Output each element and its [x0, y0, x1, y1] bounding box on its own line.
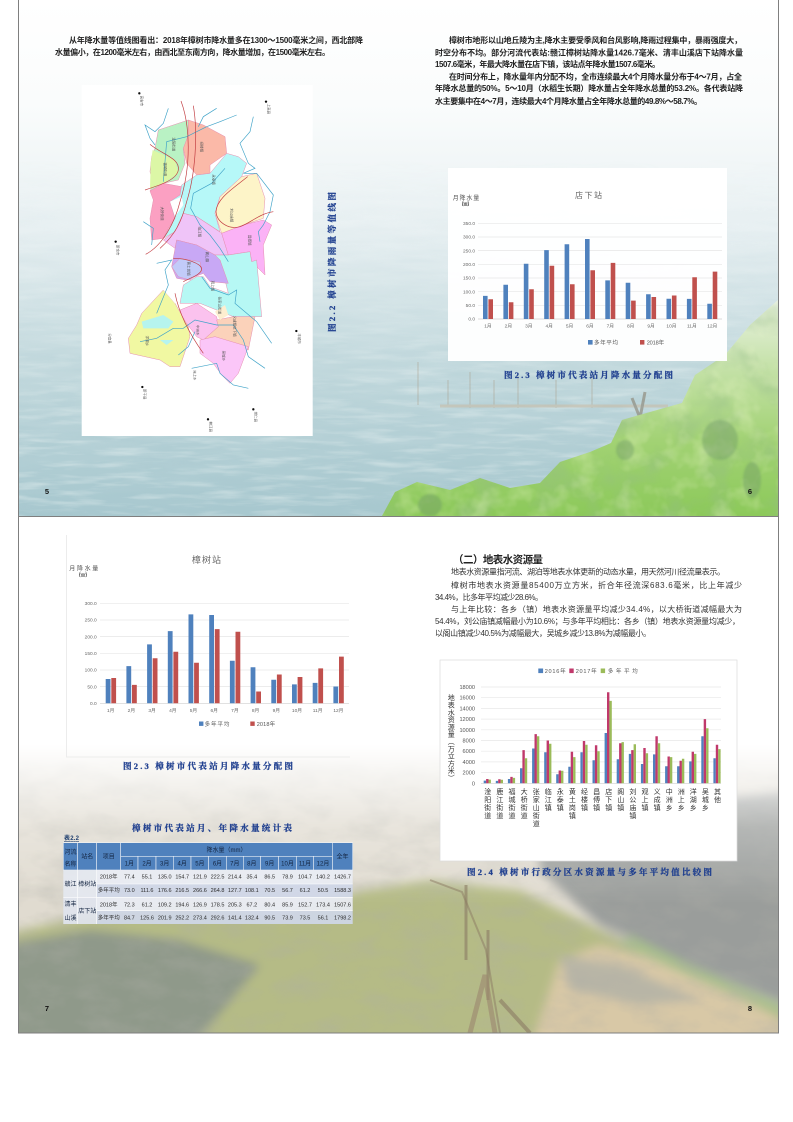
page 6 text paragraphs: 樟树市地形以山地丘陵为主,降水主要受季风和台风影响,降雨过程集中，暴雨强度大，	[449, 35, 742, 45]
legend: 多年平均	[594, 338, 618, 346]
chart panel: surface water by district bar chart: 淦阳街道	[484, 787, 491, 820]
table: monthly and annual rainfall: 252.2	[175, 916, 189, 922]
spread 1 background: water and leaves photo	[19, 126, 778, 516]
chart panel: surface water by district bar chart: 吴城乡	[701, 788, 709, 812]
map panel: rainfall isoline map: 分宜县	[108, 333, 113, 344]
chart panel: surface water by district bar chart: 临江镇	[544, 787, 552, 812]
chart panel: 店下站 monthly rainfall bar chart: 7月	[607, 324, 614, 330]
legend: 多年平均	[204, 720, 230, 728]
table: monthly and annual rainfall: 85.9	[282, 902, 293, 908]
chart panel: 店下站 monthly rainfall bar chart: 1月	[484, 324, 492, 330]
table: monthly and annual rainfall: 141.4	[228, 916, 242, 922]
table: monthly and annual rainfall: 152.7	[298, 902, 312, 908]
chart panel: 樟树站 monthly rainfall bar chart: 100.0	[85, 668, 97, 674]
chart panel: 樟树站 monthly rainfall bar chart: 2月	[128, 708, 135, 714]
table: monthly and annual rainfall: 8月	[247, 860, 256, 868]
map panel: rainfall isoline map: 大桥街道	[160, 207, 165, 221]
table: monthly and annual rainfall: 多年平均	[98, 914, 120, 922]
table: monthly and annual rainfall: 35.4	[246, 875, 257, 881]
table: monthly and annual rainfall: 河流	[64, 848, 77, 856]
page 8 text paragraphs	[435, 566, 742, 638]
map panel: rainfall isoline map: 福城街道	[163, 162, 168, 177]
chart panel: surface water by district bar chart: 刘公庙镇	[629, 787, 636, 820]
page 6 text paragraphs: 在时间分布上，降水量年内分配不均，全市连续最大4个月降水量分布于4～7月，占全	[449, 72, 742, 82]
table: monthly and annual rainfall: 1426.7	[334, 875, 351, 881]
page 8 text paragraphs: 与上年比较：各乡（镇）地表水资源量平均减少34.4%，以大桥街道减幅最大为	[451, 604, 742, 614]
table: monthly and annual rainfall: 项目	[103, 854, 115, 860]
chart panel: surface water by district bar chart: 永泰镇	[556, 787, 564, 812]
chart panel: 店下站 monthly rainfall bar chart: 8月	[627, 324, 634, 330]
legend: 2017年	[576, 667, 597, 675]
map panel: rainfall isoline map: 刘公庙镇	[230, 208, 235, 223]
chart panel: 店下站 monthly rainfall bar chart: 300.0	[463, 235, 475, 241]
chart panel: 店下站 monthly rainfall bar chart: 3月	[525, 324, 533, 330]
table: monthly and annual rainfall: 清丰	[64, 900, 77, 908]
chart panel: 樟树站 monthly rainfall bar chart: 5月	[190, 708, 197, 714]
map caption (rotated): 图2.2 樟树市降雨量等值线图	[326, 192, 337, 332]
table: monthly and annual rainfall: 4月	[178, 860, 187, 868]
map panel: rainfall isoline map: 经楼镇	[200, 142, 205, 153]
map panel: rainfall isoline map	[82, 85, 313, 436]
chart panel: 樟树站 monthly rainfall bar chart: 1月	[107, 708, 114, 714]
table: monthly and annual rainfall: 6月	[213, 860, 222, 868]
chart panel: 店下站 monthly rainfall bar chart: 10月	[666, 324, 677, 330]
map panel: rainfall isoline map: 新余市	[116, 245, 121, 256]
table: monthly and annual rainfall: 降水量（mm）	[206, 846, 246, 854]
axis title: 地表水资源量（万立方米）	[447, 693, 455, 782]
table: monthly and annual rainfall: 多年平均	[98, 886, 120, 894]
map panel: rainfall isoline map: 上高县	[266, 104, 271, 115]
chart panel: surface water by district bar chart: 8000	[463, 738, 475, 744]
page 8 text paragraphs: 地表水资源量指河流、湖泊等地表水体更新的动态水量，用天然河川径流量表示。	[451, 566, 725, 576]
table: monthly and annual rainfall: 10月	[281, 860, 294, 868]
table: monthly and annual rainfall: 73.0	[124, 888, 135, 894]
map panel: rainfall isoline map: 义成镇店下镇	[232, 316, 237, 337]
page 6 text paragraphs: 水主要集中在4～7月，连续最大4个月降水量占全年降水总量的49.8%～58.7%。	[435, 96, 702, 106]
table: monthly and annual rainfall: 樟树站	[78, 880, 96, 888]
table: monthly and annual rainfall: 5月	[195, 860, 205, 868]
map panel: rainfall isoline map: 洋湖乡	[145, 336, 150, 347]
table: monthly and annual rainfall: 214.4	[228, 875, 242, 881]
chart panel: 樟树站 monthly rainfall bar chart: 10月	[292, 708, 302, 714]
chart panel: 樟树站 monthly rainfall bar chart: 9月	[273, 708, 280, 714]
table: monthly and annual rainfall: 赣江	[64, 880, 77, 888]
chart panel: 店下站 monthly rainfall bar chart: 4月	[545, 324, 553, 330]
table: monthly and annual rainfall: 108.1	[245, 888, 259, 894]
chart panel: 樟树站 monthly rainfall bar chart: 月降水量	[69, 564, 98, 572]
map panel: rainfall isoline map: 吴城乡	[221, 351, 226, 362]
caption: figure 2.3 page 6: 图2.3 樟树市代表站月降水量分配图	[504, 369, 673, 380]
table: monthly and annual rainfall: 140.2	[316, 875, 330, 881]
table: monthly and annual rainfall: 104.7	[298, 875, 312, 881]
chart panel: 店下站 monthly rainfall bar chart: 0.0	[468, 317, 475, 323]
chart panel: surface water by district bar chart: 观上镇	[641, 788, 648, 812]
chart panel: surface water by district bar chart: 12000	[459, 717, 475, 723]
chart panel: 樟树站 monthly rainfall bar chart: 250.0	[85, 618, 97, 624]
chart panel: surface water by district bar chart: 福城街道	[508, 787, 516, 820]
chart panel: 樟树站 monthly rainfall bar chart	[66, 535, 350, 757]
chart panel: 樟树站 monthly rainfall bar chart: 150.0	[85, 651, 97, 657]
chart panel: surface water by district bar chart	[440, 660, 737, 861]
chart panel: 樟树站 monthly rainfall bar chart: 11月	[313, 708, 323, 714]
chart panel: 樟树站 monthly rainfall bar chart: 300.0	[85, 601, 97, 607]
page 5 text paragraph: 从年降水量等值线图看出：2018年樟树市降水量多在1300～1500毫米之间，西北部降	[69, 35, 363, 45]
table: monthly and annual rainfall: 126.9	[193, 902, 207, 908]
chart panel: surface water by district bar chart: 18000	[459, 685, 475, 691]
table: monthly and annual rainfall: 216.5	[175, 888, 189, 894]
legend	[588, 338, 665, 346]
table: monthly and annual rainfall: 2月	[142, 860, 152, 868]
page 6 text paragraphs: 1507.6毫米，年最大降水量在店下镇，该站点年降水量1507.6毫米。	[435, 59, 660, 69]
map panel: rainfall isoline map: 张家山街道	[217, 297, 222, 315]
map panel: rainfall isoline map: 昌傅镇	[247, 235, 252, 246]
table: monthly and annual rainfall: 1507.6	[334, 902, 351, 908]
map panel: rainfall isoline map: 高安市	[140, 96, 145, 107]
table label: 表2.2	[64, 834, 80, 842]
page 8 text paragraphs: 以阁山镇减少40.5%为减幅最大，吴城乡减少13.8%为减幅最小。	[435, 628, 651, 638]
table: monthly and annual rainfall: 名称	[64, 860, 77, 868]
table: monthly and annual rainfall: 78.9	[282, 875, 293, 881]
table: monthly and annual rainfall: 292.6	[211, 916, 224, 922]
chart panel: surface water by district bar chart: 10000	[459, 728, 475, 734]
table: monthly and annual rainfall: 73.9	[282, 916, 293, 922]
chart panel: surface water by district bar chart: 店下镇	[605, 787, 612, 812]
table: monthly and annual rainfall: 121.9	[193, 875, 207, 881]
caption: figure 2.3 page 7: 图2.3 樟树市代表站月降水量分配图	[123, 760, 293, 771]
chart panel: surface water by district bar chart: 昌傅镇	[593, 788, 600, 812]
chart panel: 樟树站 monthly rainfall bar chart: 7月	[231, 708, 239, 714]
table title: 樟树市代表站月、年降水量统计表	[132, 822, 292, 833]
table: monthly and annual rainfall: 55.1	[142, 875, 152, 881]
chart panel: 店下站 monthly rainfall bar chart: 250.0	[463, 248, 475, 254]
chart panel: 店下站 monthly rainfall bar chart: 200.0	[463, 262, 475, 268]
map panel: rainfall isoline map: 观上镇	[211, 281, 216, 292]
section heading: （二）地表水资源量	[453, 553, 544, 566]
table: monthly and annual rainfall: 1月	[125, 860, 134, 868]
table: monthly and annual rainfall: 店下站	[78, 907, 96, 915]
table: monthly and annual rainfall: 73.5	[300, 916, 310, 922]
map panel: rainfall isoline map: 中洲乡	[196, 325, 201, 336]
chart title: 店下站	[575, 190, 602, 200]
legend	[538, 667, 638, 675]
table: monthly and annual rainfall: 222.5	[211, 875, 224, 881]
table: monthly and annual rainfall: 205.3	[228, 902, 242, 908]
page 5 text paragraph	[55, 35, 363, 57]
chart panel: surface water by district bar chart: 张家山街道	[532, 787, 540, 828]
table: monthly and annual rainfall: 3月	[160, 860, 169, 868]
table: monthly and annual rainfall: 135.0	[158, 875, 172, 881]
page 6 text paragraphs: 时空分布不均。部分河流代表站:赣江樟树站降水量1426.7毫米、清丰山溪店下站降水量	[435, 48, 743, 58]
table: monthly and annual rainfall: 132.4	[245, 916, 259, 922]
table: monthly and annual rainfall: 山溪	[64, 914, 77, 922]
page 6 text paragraphs	[435, 35, 743, 106]
chart panel: surface water by district bar chart: 2000	[463, 771, 475, 777]
chart panel: surface water by district bar chart: 16000	[459, 696, 475, 702]
table: monthly and annual rainfall: 2018年	[100, 900, 118, 908]
table: monthly and annual rainfall: 176.6	[158, 888, 172, 894]
chart panel: surface water by district bar chart: 0	[472, 781, 475, 787]
table: monthly and annual rainfall: 194.6	[175, 902, 189, 908]
table: monthly and annual rainfall: 72.3	[124, 902, 135, 908]
table: monthly and annual rainfall: 173.4	[316, 902, 330, 908]
table: monthly and annual rainfall: 1798.2	[334, 916, 351, 922]
map panel: rainfall isoline map: 崇仁县	[254, 412, 259, 423]
caption: figure 2.4: 图2.4 樟树市行政分区水资源量与多年平均值比较图	[467, 866, 712, 877]
table: monthly and annual rainfall: 80.4	[264, 902, 275, 908]
chart panel: 店下站 monthly rainfall bar chart: 50.0	[466, 303, 475, 309]
table: monthly and annual rainfall: 111.6	[141, 888, 153, 894]
chart panel: surface water by district bar chart: 6000	[463, 749, 475, 755]
table: monthly and annual rainfall: 站名	[81, 852, 93, 860]
map panel: rainfall isoline map: 阁山镇	[205, 252, 210, 263]
table: monthly and annual rainfall: 全年	[336, 852, 349, 860]
map panel: rainfall isoline map: 新干县	[143, 389, 148, 400]
chart panel: 店下站 monthly rainfall bar chart: 6月	[586, 324, 594, 330]
table: monthly and annual rainfall: 7月	[230, 860, 239, 868]
chart panel: 樟树站 monthly rainfall bar chart: （mm）	[75, 572, 91, 579]
chart panel: surface water by district bar chart: 黄土岗镇	[568, 787, 576, 820]
map panel: rainfall isoline map: 临江镇	[197, 227, 202, 238]
chart panel: 店下站 monthly rainfall bar chart: 5月	[566, 324, 573, 330]
chart panel: 樟树站 monthly rainfall bar chart: 12月	[333, 708, 343, 714]
table: monthly and annual rainfall: 56.1	[318, 916, 328, 922]
chart panel: 店下站 monthly rainfall bar chart: 9月	[647, 324, 655, 330]
table: monthly and annual rainfall: 2018年	[100, 873, 118, 881]
table: monthly and annual rainfall: 127.7	[228, 888, 242, 894]
map panel: rainfall isoline map: 峡江县	[208, 422, 213, 433]
table: monthly and annual rainfall: 201.9	[158, 916, 172, 922]
table: monthly and annual rainfall: 273.4	[193, 916, 207, 922]
chart panel: 店下站 monthly rainfall bar chart: 11月	[687, 324, 697, 330]
map panel: rainfall isoline map: 黄土岗镇	[186, 262, 191, 276]
table: monthly and annual rainfall: 266.6	[193, 888, 207, 894]
chart panel: surface water by district bar chart: 洋湖乡	[689, 787, 697, 812]
chart panel: 樟树站 monthly rainfall bar chart: 200.0	[85, 634, 97, 640]
chart title: 樟树站	[192, 554, 221, 565]
table: monthly and annual rainfall: 67.2	[246, 902, 257, 908]
table: monthly and annual rainfall: 11月	[299, 860, 311, 868]
spread 2 background: mountain, meadow and fence photo	[19, 761, 778, 1032]
chart panel: 樟树站 monthly rainfall bar chart: 50.0	[87, 684, 97, 690]
table: monthly and annual rainfall: 90.5	[264, 916, 275, 922]
table: monthly and annual rainfall: 178.5	[211, 902, 224, 908]
chart panel: 店下站 monthly rainfall bar chart	[448, 168, 727, 361]
table: monthly and annual rainfall: 84.7	[124, 916, 135, 922]
chart panel: surface water by district bar chart: 义成镇	[653, 788, 661, 812]
chart panel: 樟树站 monthly rainfall bar chart: 4月	[169, 708, 177, 714]
chart panel: 樟树站 monthly rainfall bar chart: 8月	[252, 708, 259, 714]
page number 6: 6	[748, 487, 752, 496]
table: monthly and annual rainfall: 154.7	[175, 875, 189, 881]
table: monthly and annual rainfall: 109.2	[158, 902, 172, 908]
chart panel: 店下站 monthly rainfall bar chart: 12月	[707, 324, 717, 330]
page number 5: 5	[45, 487, 49, 496]
page 6 text paragraphs: 年降水总量的50%。5～10月（水稻生长期）降水量占全年降水总量的53.2%。各代表站降	[435, 83, 743, 93]
chart panel: surface water by district bar chart: 14000	[459, 706, 475, 712]
legend	[199, 720, 276, 728]
map panel: rainfall isoline map: 洲上乡	[192, 370, 197, 381]
page 8 text paragraphs: 34.4%，比多年平均减少28.6%。	[435, 592, 543, 602]
legend: 2018年	[257, 720, 276, 728]
table: monthly and annual rainfall: 70.5	[264, 888, 275, 894]
chart panel: surface water by district bar chart: 其他	[714, 788, 721, 804]
table: monthly and annual rainfall: 77.4	[124, 875, 135, 881]
table: monthly and annual rainfall	[63, 843, 353, 924]
table: monthly and annual rainfall: 50.5	[318, 888, 328, 894]
chart panel: surface water by district bar chart: 大桥街道	[520, 787, 528, 820]
map panel: rainfall isoline map: 丰城市	[297, 333, 302, 344]
legend: 多年平均	[608, 667, 638, 675]
map panel: rainfall isoline map: 永泰镇	[212, 174, 217, 185]
page 8 text paragraphs: 54.4%，刘公庙镇减幅最小为10.6%；与多年平均相比：各乡（镇）地表水资源量均减少，	[435, 616, 740, 626]
legend: 2016年	[545, 667, 566, 675]
table: monthly and annual rainfall: 264.8	[211, 888, 224, 894]
table: monthly and annual rainfall: 56.7	[282, 888, 293, 894]
page number 8: 8	[748, 1004, 752, 1013]
chart panel: surface water by district bar chart: 经楼镇	[580, 787, 588, 812]
map panel: rainfall isoline map: 淦阳街道	[172, 137, 177, 152]
table: monthly and annual rainfall: 9月	[265, 860, 274, 868]
page 5 text paragraph: 水量偏小，在1200毫米左右，由西北至东南方向，降水量增加，在1500毫米左右。	[55, 47, 330, 57]
chart panel: 樟树站 monthly rainfall bar chart: 6月	[210, 708, 218, 714]
table: monthly and annual rainfall: 86.5	[264, 875, 275, 881]
table: monthly and annual rainfall: 12月	[317, 860, 329, 868]
chart panel: surface water by district bar chart: 4000	[463, 760, 475, 766]
chart panel: 樟树站 monthly rainfall bar chart: 3月	[148, 708, 156, 714]
table: monthly and annual rainfall: 61.2	[142, 902, 152, 908]
chart panel: 店下站 monthly rainfall bar chart: 150.0	[463, 276, 475, 282]
chart panel: 店下站 monthly rainfall bar chart: 2月	[505, 324, 512, 330]
chart panel: 店下站 monthly rainfall bar chart: （mm）	[458, 201, 473, 208]
chart panel: 店下站 monthly rainfall bar chart: 350.0	[463, 221, 475, 227]
chart panel: surface water by district bar chart: 阁山镇	[617, 787, 624, 812]
table: monthly and annual rainfall: 125.6	[140, 916, 154, 922]
page number 7: 7	[45, 1004, 49, 1013]
chart panel: 店下站 monthly rainfall bar chart: 月降水量	[453, 194, 479, 202]
legend: 2018年	[647, 338, 665, 346]
table: monthly and annual rainfall: 61.2	[300, 888, 310, 894]
page 8 text paragraphs: 樟树市地表水资源量85400万立方米，折合年径流深683.6毫米，比上年减少	[451, 580, 742, 590]
table: monthly and annual rainfall: 1588.3	[334, 888, 351, 894]
chart panel: 店下站 monthly rainfall bar chart: 100.0	[463, 289, 475, 295]
chart panel: surface water by district bar chart: 洲上乡	[677, 788, 685, 812]
chart panel: surface water by district bar chart: 鹿江街道	[496, 787, 503, 820]
chart panel: surface water by district bar chart: 中洲乡	[665, 787, 673, 812]
chart panel: 樟树站 monthly rainfall bar chart: 0.0	[90, 701, 97, 707]
